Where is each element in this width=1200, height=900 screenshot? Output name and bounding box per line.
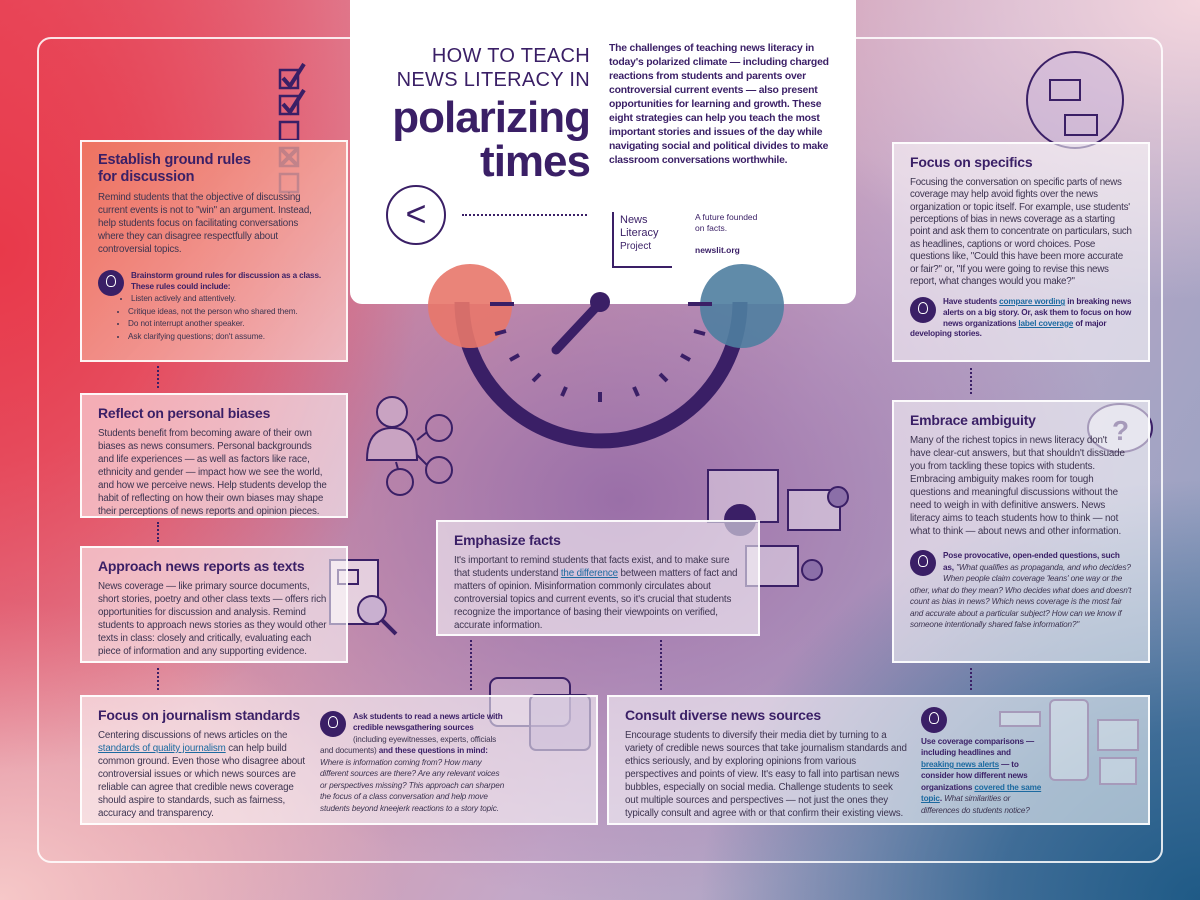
header panel [350, 0, 856, 304]
panel: reflect on personal biases: Reflect on personal biases [98, 405, 270, 421]
phone icons bottom right [1000, 700, 1138, 784]
panel: consult diverse news sources: Encourage students to diversify their media diet by turning to a variety of credible news sources that take journalism standards and ethics seriously, and by exploring opinions from various perspectives and points of view. It's easy to fall into partisan news bubbles, especially on social media. Challenge students to seek out multiple sources and perspectives — not just the ones they typically consult and agree with or that confirm their existing views. [625, 730, 907, 819]
panel: focus on journalism standards: Ask students to read a news article with credible newsgathering sources (including eyewitnesses, experts, officials and documents) and these questions in mind: Where is information coming from? How many different sources are there? Are any relevant voices or perspectives missing? This approach can sharpen the focus of a class conversation and help move students beyond kneejerk reactions to a story topic. [320, 712, 504, 813]
panel: focus on specifics: Focus on specifics [910, 154, 1032, 170]
person icon [367, 397, 452, 495]
title: NEWS LITERACY IN [397, 69, 590, 91]
panel: establish ground rules: Brainstorm ground rules for discussion as a class. These rules could include: [131, 271, 321, 291]
panel: approach news reports as texts: News coverage — like primary source documents, short stories, poetry and other class texts — offers rich opportunities for discussion and analysis. Remind students to approach news stories as they would other texts in class: closely and critically, evaluating each piece of information and any supporting evidence. [98, 581, 326, 657]
checkboxes [280, 64, 304, 192]
header panel: on facts. [695, 223, 727, 233]
panel: embrace ambiguity: Embrace ambiguity [910, 412, 1036, 428]
panel: focus on journalism standards: Focus on journalism standards [98, 707, 300, 723]
panel: focus on journalism standards [80, 695, 598, 825]
panel: focus on specifics: Focusing the conversation on specific parts of news coverage may help avoid fights over the news organization or topic itself. For example, use students' perceptions of bias in news coverage as a starting point and ask them to concentrate on particulars, such as headlines, captions or word choices. Pose questions like, "Could this have been more accurate or fair?" or, "If you were going to revise this news report, what changes would you make?" [910, 177, 1132, 287]
top right icon [1027, 52, 1123, 148]
cloud ?: ? [1112, 415, 1129, 446]
panel: reflect on personal biases [80, 393, 348, 518]
title: polarizing [392, 93, 590, 142]
panel: approach news reports as texts: Approach news reports as texts [98, 558, 304, 574]
panel: establish ground rules: Ask clarifying questions; don't assume. [128, 332, 265, 341]
panel: embrace ambiguity [892, 400, 1150, 663]
dotted connectors [157, 366, 159, 388]
header panel: A future founded [695, 212, 757, 222]
panel: establish ground rules: Establish ground rules [98, 152, 251, 168]
panel: establish ground rules: for discussion [98, 169, 194, 185]
panel: reflect on personal biases: Students benefit from becoming aware of their own biases as news consumers. Personal backgrounds and life experiences — as well as factors like race, ethnicity and gender — impact how we see the world, and how we perceive news. Help students develop the habit of reflecting on how their own biases may shape their perceptions of news reports and opinion pieces. [98, 428, 327, 517]
icon: back arrow circle: < [405, 193, 427, 234]
panel: focus on journalism standards: Centering discussions of news articles on the standards of quality journalism can help build common ground. Even those who disagree about controversial issues or which news sources are reliable can agree that credible news coverage should aspire to standards, such as fairness, accuracy and transparency. [98, 730, 305, 819]
panel: establish ground rules: Do not interrupt another speaker. [128, 319, 244, 328]
header panel: newslit.org [695, 245, 740, 255]
panel: embrace ambiguity: Pose provocative, open-ended questions, such as, "What qualifies as propaganda, and who decides? When people claim coverage 'leans' one way or the other, what do they mean? Who decides what does and doesn't count as bias in news? Which news coverage is the most fair and accurate about a particular subject? How can we know if someone intentionally shared false information?" [910, 551, 1131, 629]
panel: emphasize facts: It's important to remind students that facts exist, and to make sure that students understand the difference between matters of fact and matters of opinion. Misinformation commonly circulates about controversial topics and current events, so it's crucial that students recognize the importance of basing their viewpoints on verified, accurate information. [454, 555, 737, 631]
logo: Project [620, 241, 651, 252]
logo [612, 212, 672, 268]
panel: establish ground rules: Remind students that the objective of discussing current events is not to "win" an argument. Instead, help students focus on facilitating conversations where they can disagree respectfully about controversial topics. [98, 192, 312, 255]
icon: back arrow circle [386, 185, 446, 245]
doc+magnifier [330, 560, 396, 634]
panel: focus on specifics: Have students compare wording in breaking news alerts on a big story. Or, ask them to focus on how news organizations label coverage of major developing stories. [910, 297, 1131, 338]
speech bubbles [490, 678, 590, 750]
logo: Literacy [620, 227, 659, 239]
title: HOW TO TEACH [432, 45, 590, 67]
panel: establish ground rules: Listen actively and attentively. [131, 294, 236, 303]
panel: emphasize facts [436, 520, 760, 636]
panel: establish ground rules [80, 140, 348, 362]
title: times [480, 137, 590, 186]
title [392, 45, 590, 186]
cloud ? [1088, 404, 1152, 452]
panel: embrace ambiguity: Many of the richest topics in news literacy don't have clear-cut answers, but that shouldn't dissuade you from tackling these topics with students. Embracing ambiguity makes room for tough questions and meaningful discussions without the need to weigh in with definitive answers. News literacy aims to teach students how to think — not what to think — about news and other information. [910, 435, 1125, 537]
intro text: The challenges of teaching news literacy in today's polarized climate — including charged reactions from students and parents over controversial current events — also present opportunities for learning and growth. These eight strategies can help you teach the most important stories and issues of the day while navigating social and political divides to make classroom conversations worthwhile. [609, 43, 829, 166]
panel: focus on specifics [892, 142, 1150, 362]
panel: consult diverse news sources: Use coverage comparisons — including headlines and breaking news alerts — to consider how different news organizations covered the same topic. What similarities or differences do students notice? [921, 737, 1041, 815]
windows [708, 470, 848, 586]
logo: News [620, 214, 648, 226]
panel: consult diverse news sources: Consult diverse news sources [625, 707, 821, 723]
panel: consult diverse news sources [607, 695, 1150, 825]
panel: emphasize facts: Emphasize facts [454, 532, 561, 548]
panel: approach news reports as texts [80, 546, 348, 663]
panel: establish ground rules: Critique ideas, not the person who shared them. [128, 307, 298, 316]
